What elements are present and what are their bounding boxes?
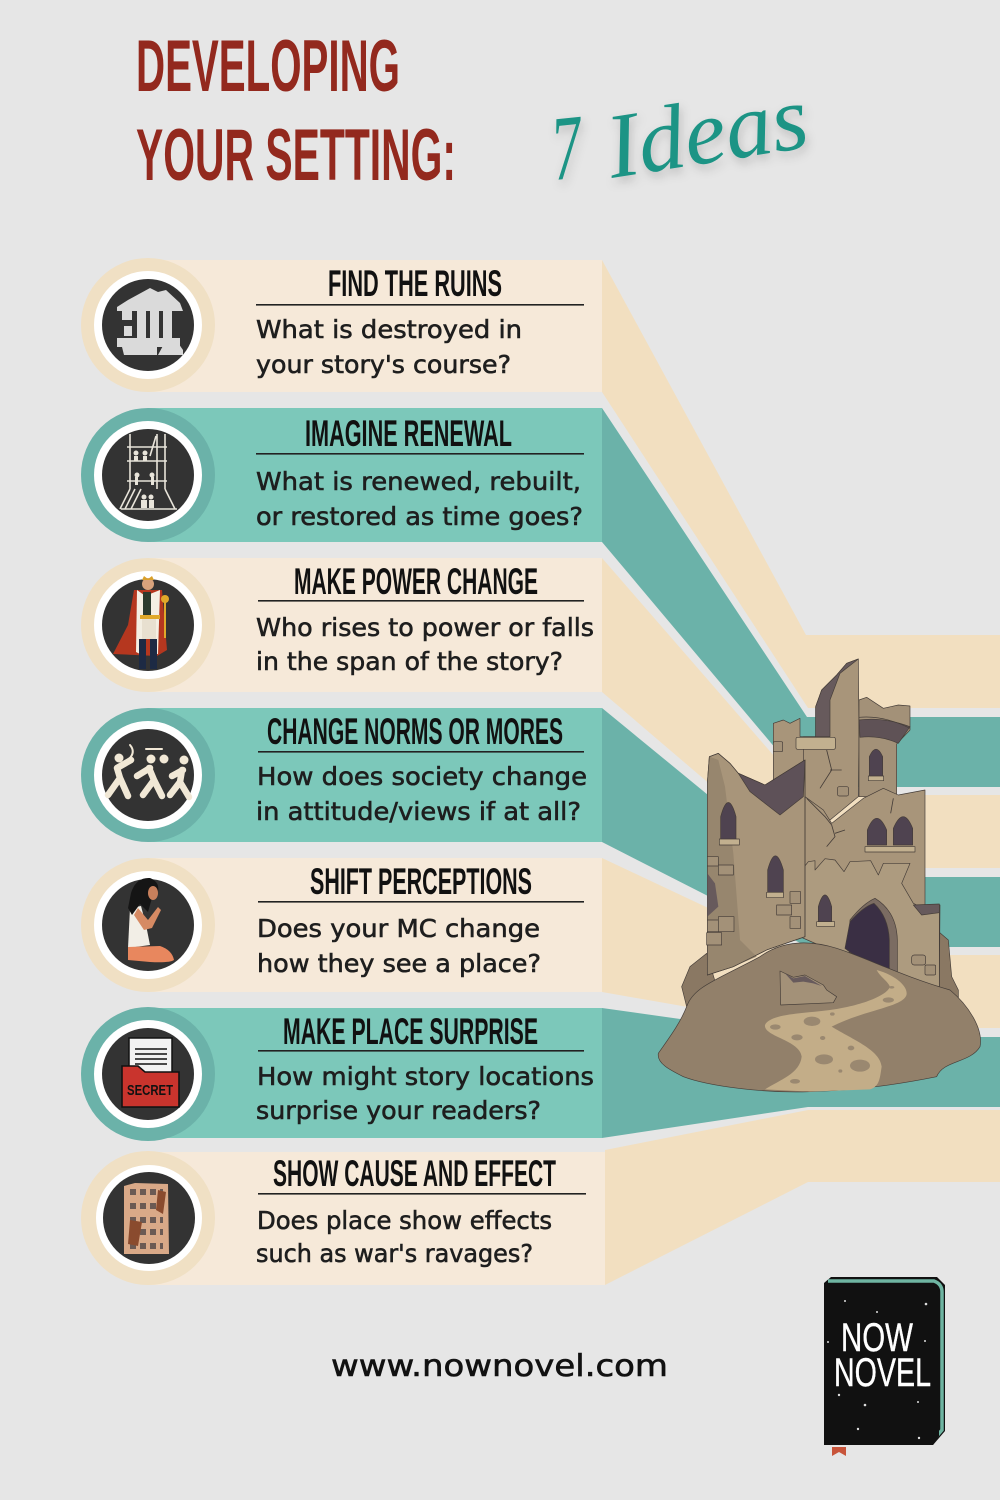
gatehouse: [800, 859, 939, 987]
panel: shift perceptions: [81, 858, 602, 992]
panel: change norms or mores: [81, 708, 602, 842]
icon: secret folder: SECRET: [127, 1082, 173, 1099]
panel: make power change: [81, 558, 602, 692]
title and text: SHIFT PERCEPTIONS: [310, 861, 532, 902]
right block: [800, 788, 940, 987]
cracks: [760, 750, 893, 917]
icon: ruined temple: [117, 288, 183, 355]
title and text: MAKE POWER CHANGE: [294, 561, 538, 602]
logo: Now Novel book: NOW: [841, 1316, 913, 1360]
turret: [859, 697, 910, 797]
panel: imagine renewal: What is renewed, rebuilt,: [256, 467, 581, 496]
title and text: SHOW CAUSE AND EFFECT: [273, 1153, 556, 1194]
panel: find the ruins: What is destroyed in: [256, 315, 522, 344]
panel: imagine renewal: or restored as time goes?: [256, 502, 583, 531]
panel: change norms or mores: in attitude/views if at all?: [256, 797, 581, 826]
icon: damaged building: [124, 1183, 169, 1254]
panel: show cause and effect: [81, 1151, 605, 1285]
icon: king: [113, 576, 169, 669]
logo: Now Novel book: [824, 1277, 945, 1456]
icon: secret folder: [122, 1038, 179, 1107]
title and text: FIND THE RUINS: [328, 263, 502, 304]
panel: change norms or mores: How does society change: [257, 762, 587, 791]
panel: make place surprise: surprise your readers?: [256, 1096, 541, 1125]
hill: [658, 943, 981, 1092]
title: YOUR SETTING:: [136, 115, 456, 196]
back tower: [773, 718, 817, 807]
panel: show cause and effect: such as war's ravages?: [256, 1239, 533, 1268]
panel: make power change: in the span of the story?: [256, 647, 563, 676]
panel: make place surprise: [81, 1007, 602, 1141]
panel: shift perceptions: how they see a place?: [257, 949, 541, 978]
subtitle: 7 Ideas: Ideas: [598, 65, 815, 198]
left rubble and right rubble: [682, 930, 958, 1010]
boulder: [780, 971, 837, 1005]
panel: imagine renewal: [81, 408, 602, 542]
path: [765, 970, 907, 1092]
left tower: [707, 753, 805, 975]
logo: Now Novel book: NOVEL: [834, 1351, 931, 1395]
title and text: CHANGE NORMS OR MORES: [267, 711, 563, 752]
title: [136, 26, 456, 196]
gate arch: [849, 898, 897, 974]
panel: make place surprise: How might story locations: [257, 1062, 594, 1091]
panel: make power change: Who rises to power or falls: [256, 613, 594, 642]
panel: show cause and effect: Does place show effects: [257, 1206, 552, 1235]
subtitle: 7 Ideas: 7: [546, 95, 590, 200]
title: DEVELOPING: [136, 26, 400, 107]
illustration: ruined castle: [658, 659, 981, 1092]
icon: scaffolding: [120, 434, 177, 509]
panel: find the ruins: [81, 258, 602, 392]
website url: www.nownovel.com: [331, 1349, 668, 1384]
icon: running crowd: [108, 745, 189, 797]
connector bands to castle: [602, 260, 1000, 1285]
panel: find the ruins: your story's course?: [256, 350, 511, 379]
title and text: MAKE PLACE SURPRISE: [283, 1011, 538, 1052]
panel: shift perceptions: Does your MC change: [257, 914, 540, 943]
icon: kneeling woman: [128, 878, 174, 962]
bookmark: [832, 1447, 846, 1456]
title and text: IMAGINE RENEWAL: [305, 413, 512, 454]
